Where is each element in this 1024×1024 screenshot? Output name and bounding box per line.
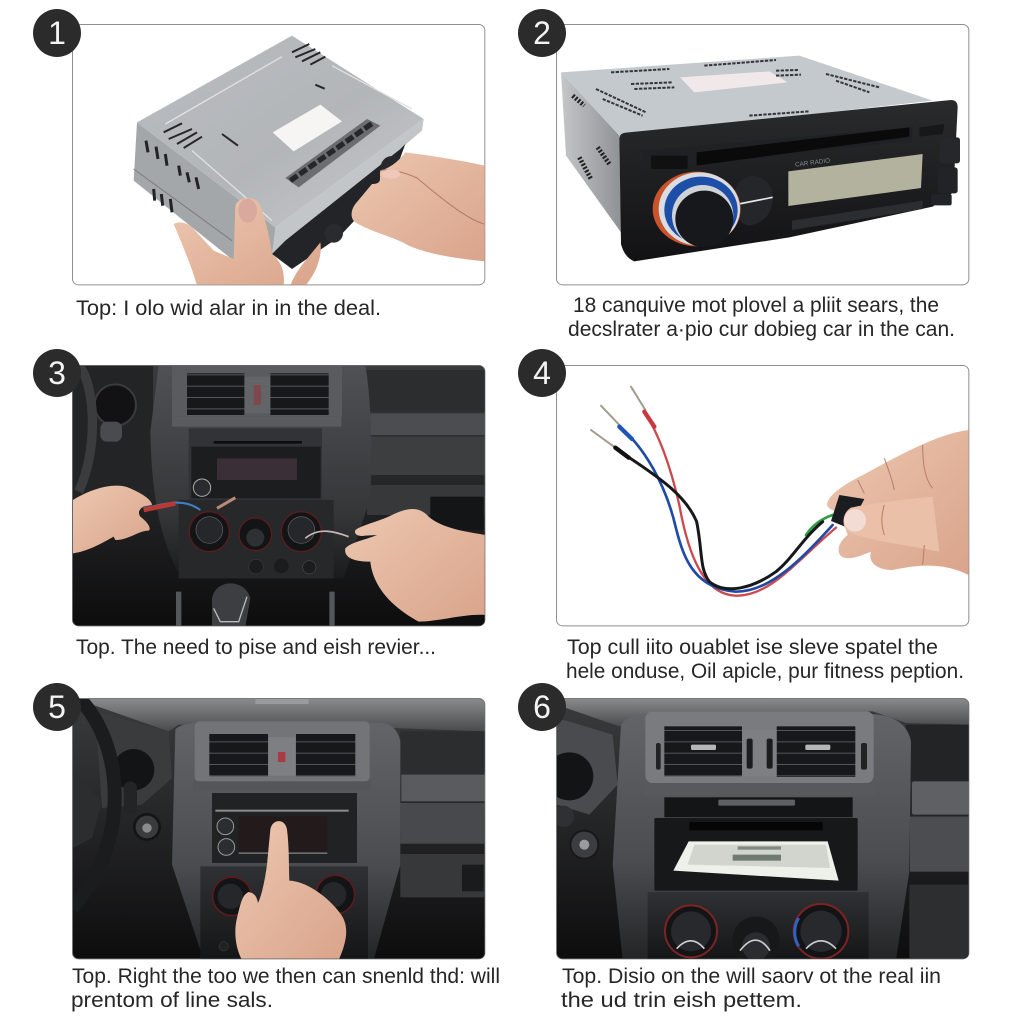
badge: step 2 [518,9,566,57]
caption: step 5: prentom of line sals. [71,988,273,1012]
icon: gear shifter [212,583,250,627]
badge: step 5: 5 [48,689,66,725]
dashboard top [72,698,486,731]
caption: step 6: the ud trin eish pettem. [561,988,802,1012]
icon: center console [150,365,371,578]
icon: wire bundle [591,387,836,596]
icon: steering wheel [73,699,137,848]
dashboard right trim [906,725,969,960]
caption: step 6 [561,964,941,1012]
icon: connector [831,495,864,528]
caption: step 2: decslrater a·pio cur dobieg car in the can. [568,317,955,341]
gauge and ignition [98,743,172,841]
icon: center console [172,721,400,960]
icon: hand [827,430,969,575]
panel 6: installed head unit in dashboard [545,698,970,963]
badge: step 6 [518,683,566,731]
steering wheel and gauge [73,365,153,492]
climate knobs [189,512,321,574]
gauge and ignition [557,720,618,858]
caption: step 6: Top. Disio on the will saorv ot the real iin [562,964,941,988]
badge: step 4: 4 [533,355,551,391]
dashboard top [556,698,970,726]
caption: step 4: Top cull iito ouablet ise sleve spatel the [567,635,938,659]
icon: volume knob [653,172,741,247]
icon: silver radio chassis [134,36,424,269]
icon: left hand [174,198,321,286]
caption: step 4 [566,635,964,683]
icon: center console [613,711,911,963]
badge: step 6: 6 [533,689,551,725]
panel 4: wire harness held in hand [556,366,969,626]
icon: radio head unit: CAR RADIO [795,157,831,169]
caption: step 5: Top. Right the too we then can snenld thd: will [72,964,500,988]
icon: right hand [352,152,485,261]
badge: step 1: 1 [48,15,66,51]
caption: step 3: Top. The need to pise and eish revier... [76,635,436,659]
panel 5: pressing radio button [72,698,486,960]
caption: step 1: Top: I olo wid alar in in the deal. [76,296,381,320]
icon: preset buttons [733,176,773,226]
caption: step 4: hele onduse, Oil apicle, pur fitness peption. [566,659,964,683]
badge: step 3 [33,349,81,397]
badge: step 5 [33,683,81,731]
dashboard right trim [365,370,485,530]
icon: paper card in radio slot [673,841,839,881]
icon: radio head unit [561,56,960,261]
climate knobs [665,904,848,963]
icon: wires between hands [144,498,349,538]
dashboard right trim [400,731,485,897]
panel 3: connecting wires at the dashboard [72,365,485,627]
panel 1: removing the radio unit by hand [72,24,485,286]
badge: step 4 [518,349,566,397]
icon: thumb [843,497,939,552]
caption: step 2: 18 canquive mot plovel a pliit sears, the [573,293,939,317]
caption: step 5 [71,964,500,1012]
panel 2: car radio head unit [556,24,969,285]
icon: pointing hand [235,821,346,960]
badge: step 1 [33,9,81,57]
icon: left hand [73,486,152,553]
badge: step 3: 3 [48,355,66,391]
caption: step 2 [568,293,955,341]
badge: step 2: 2 [533,15,551,51]
icon: right hand [345,509,485,622]
